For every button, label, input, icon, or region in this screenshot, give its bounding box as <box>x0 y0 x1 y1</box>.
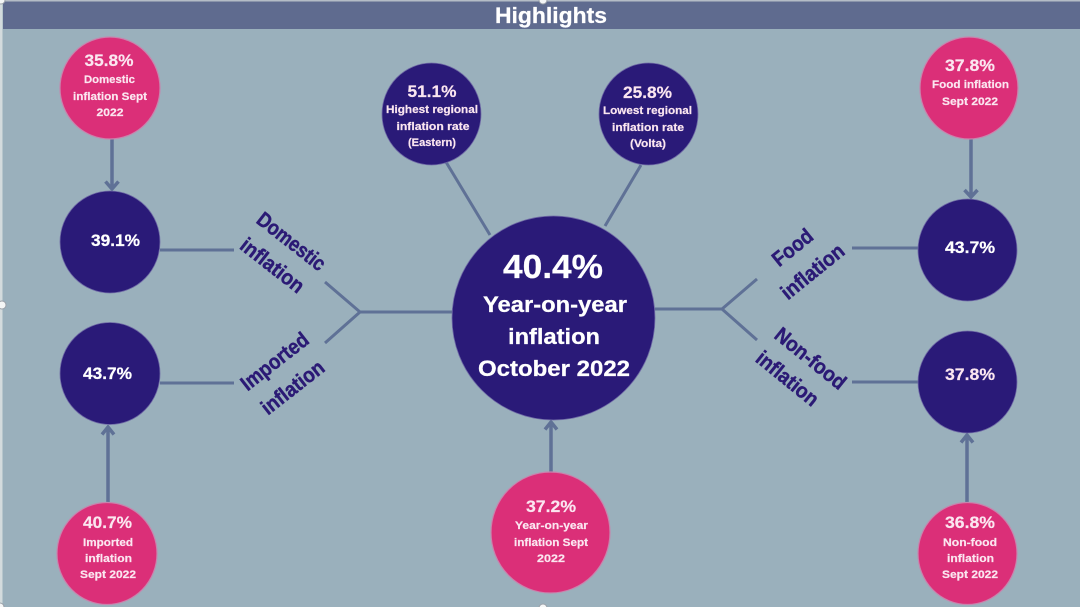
label: domestic inflation: Domestic <box>252 208 330 276</box>
highest regional: Highest regional <box>386 104 478 116</box>
central circle: inflation <box>508 324 600 349</box>
domestic Sept: 35.8% <box>84 52 134 70</box>
central circle: October 2022 <box>478 356 630 381</box>
non-food Sept <box>918 502 1017 604</box>
highest regional: inflation rate <box>396 121 470 133</box>
lowest regional: inflation rate <box>612 122 684 134</box>
label: domestic inflation: inflation <box>235 234 309 298</box>
arrow: year-on-year <box>545 422 557 472</box>
arrow: food <box>964 139 978 197</box>
lowest regional: Lowest regional <box>603 105 692 117</box>
year-on-year Sept: Year-on-year <box>515 520 589 532</box>
domestic Sept: inflation Sept <box>73 91 147 103</box>
label: non-food inflation: inflation <box>751 347 823 411</box>
label: imported inflation: inflation <box>257 356 329 420</box>
food Sept: Sept 2022 <box>942 96 998 108</box>
central circle <box>452 216 655 420</box>
food Sept: 37.8% <box>945 57 995 75</box>
label: food inflation: Food <box>768 225 818 271</box>
food value: 43.7% <box>945 238 995 257</box>
domestic value <box>60 191 160 293</box>
imported Sept: Sept 2022 <box>80 569 136 581</box>
non-food Sept: inflation <box>947 553 994 565</box>
food Sept: Food inflation <box>932 79 1009 91</box>
food value <box>918 199 1017 301</box>
non-food Sept: Sept 2022 <box>942 569 998 581</box>
imported Sept: Imported <box>83 537 133 549</box>
central circle: 40.4% <box>503 248 603 285</box>
lowest regional <box>599 63 698 165</box>
arrow: non-food <box>961 435 973 503</box>
lowest regional: (Volta) <box>630 138 666 150</box>
label: domestic inflation <box>235 208 330 298</box>
highest regional: (Eastern) <box>408 137 456 149</box>
non-food Sept: 36.8% <box>945 514 995 532</box>
domestic Sept: Domestic <box>84 74 135 86</box>
imported Sept: inflation <box>85 553 132 565</box>
non-food value <box>918 331 1017 433</box>
header bar <box>3 2 1080 29</box>
year-on-year Sept: inflation Sept <box>514 537 588 549</box>
highest regional: 51.1% <box>408 83 457 101</box>
connector lines <box>160 162 918 383</box>
domestic Sept <box>60 37 160 139</box>
non-food Sept: Non-food <box>943 537 997 549</box>
label: imported inflation <box>236 328 329 420</box>
year-on-year Sept: 2022 <box>537 553 565 565</box>
imported value: 43.7% <box>83 364 132 383</box>
year-on-year Sept: 37.2% <box>526 497 576 516</box>
imported Sept <box>57 502 157 604</box>
header bar: Highlights <box>495 3 607 28</box>
highest regional <box>382 63 481 165</box>
domestic value: 39.1% <box>91 231 140 250</box>
food Sept <box>920 37 1018 139</box>
label: imported inflation: Imported <box>236 328 314 396</box>
imported value <box>60 322 160 424</box>
non-food value: 37.8% <box>945 365 995 384</box>
label: non-food inflation: Non-food <box>770 323 850 395</box>
label: food inflation: inflation <box>777 239 849 304</box>
imported Sept: 40.7% <box>83 514 132 532</box>
arrow: imported <box>102 427 114 503</box>
arrow: domestic <box>106 139 118 189</box>
lowest regional: 25.8% <box>623 84 672 102</box>
year-on-year Sept <box>491 472 610 593</box>
label: non-food inflation <box>751 323 850 411</box>
central circle: Year-on-year <box>483 292 627 317</box>
domestic Sept: 2022 <box>96 107 124 119</box>
